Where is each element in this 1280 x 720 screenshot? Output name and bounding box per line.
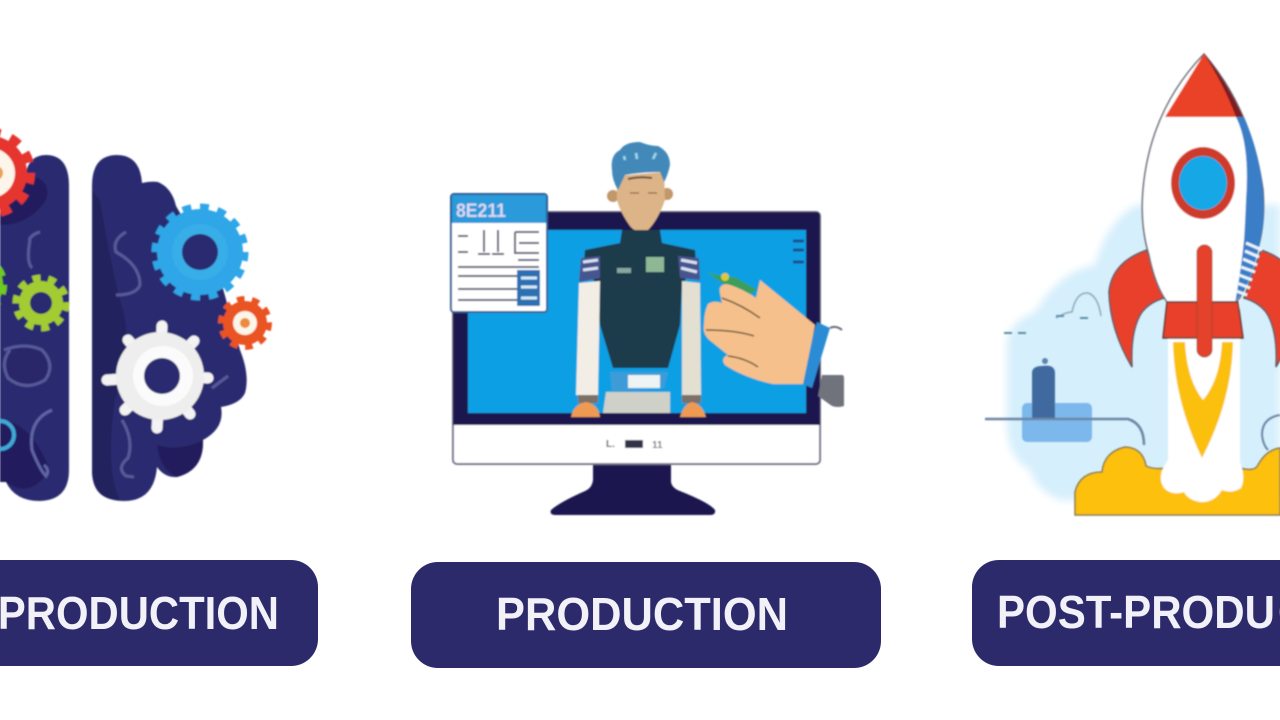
hand with wristband	[704, 272, 844, 407]
flame	[1173, 342, 1233, 458]
rocket nose cone	[1165, 54, 1243, 117]
gear: blue	[155, 207, 245, 297]
right outline curve	[1262, 415, 1280, 450]
small outline clouds	[1004, 293, 1101, 333]
arms	[576, 281, 600, 395]
legs	[603, 392, 670, 413]
gear: white	[107, 326, 208, 428]
button: production	[411, 562, 881, 668]
monitor chin labels: L.	[606, 439, 615, 450]
shoulders	[579, 256, 600, 282]
pale blue sky cloud	[1007, 205, 1280, 500]
gear: lime	[16, 278, 66, 328]
right fin	[1244, 250, 1280, 367]
monitor chin labels: 11	[652, 440, 663, 451]
ring gear: blue partial	[0, 421, 14, 449]
illustration: brain with gears	[0, 133, 269, 501]
software window	[451, 194, 547, 312]
waist	[610, 372, 668, 392]
monitor frame	[453, 212, 820, 464]
gear: orange	[221, 299, 269, 347]
torso	[584, 230, 696, 368]
left fin	[1109, 250, 1164, 367]
brain right hemisphere	[92, 155, 247, 501]
porthole	[1171, 147, 1235, 219]
illustration: monitor with character	[451, 142, 844, 515]
ground line	[985, 419, 1144, 445]
centre fin	[1197, 245, 1212, 357]
button: pre-production	[0, 560, 318, 666]
gear: green partial	[0, 256, 4, 314]
software window: 8E211	[456, 201, 506, 222]
monitor chin labels	[606, 439, 663, 451]
yellow smoke cloud	[1075, 447, 1280, 515]
brain left hemisphere	[0, 155, 69, 501]
engine base	[1163, 302, 1243, 338]
button: post-production	[972, 560, 1280, 666]
distant building	[1022, 358, 1092, 442]
button: production: PRODUCTION	[496, 588, 788, 640]
monitor stand	[551, 463, 715, 515]
white exhaust column	[1161, 300, 1243, 502]
character	[571, 142, 706, 417]
rocket body	[1142, 54, 1264, 303]
illustration: rocket launch	[985, 54, 1280, 515]
gear: red	[0, 133, 30, 213]
